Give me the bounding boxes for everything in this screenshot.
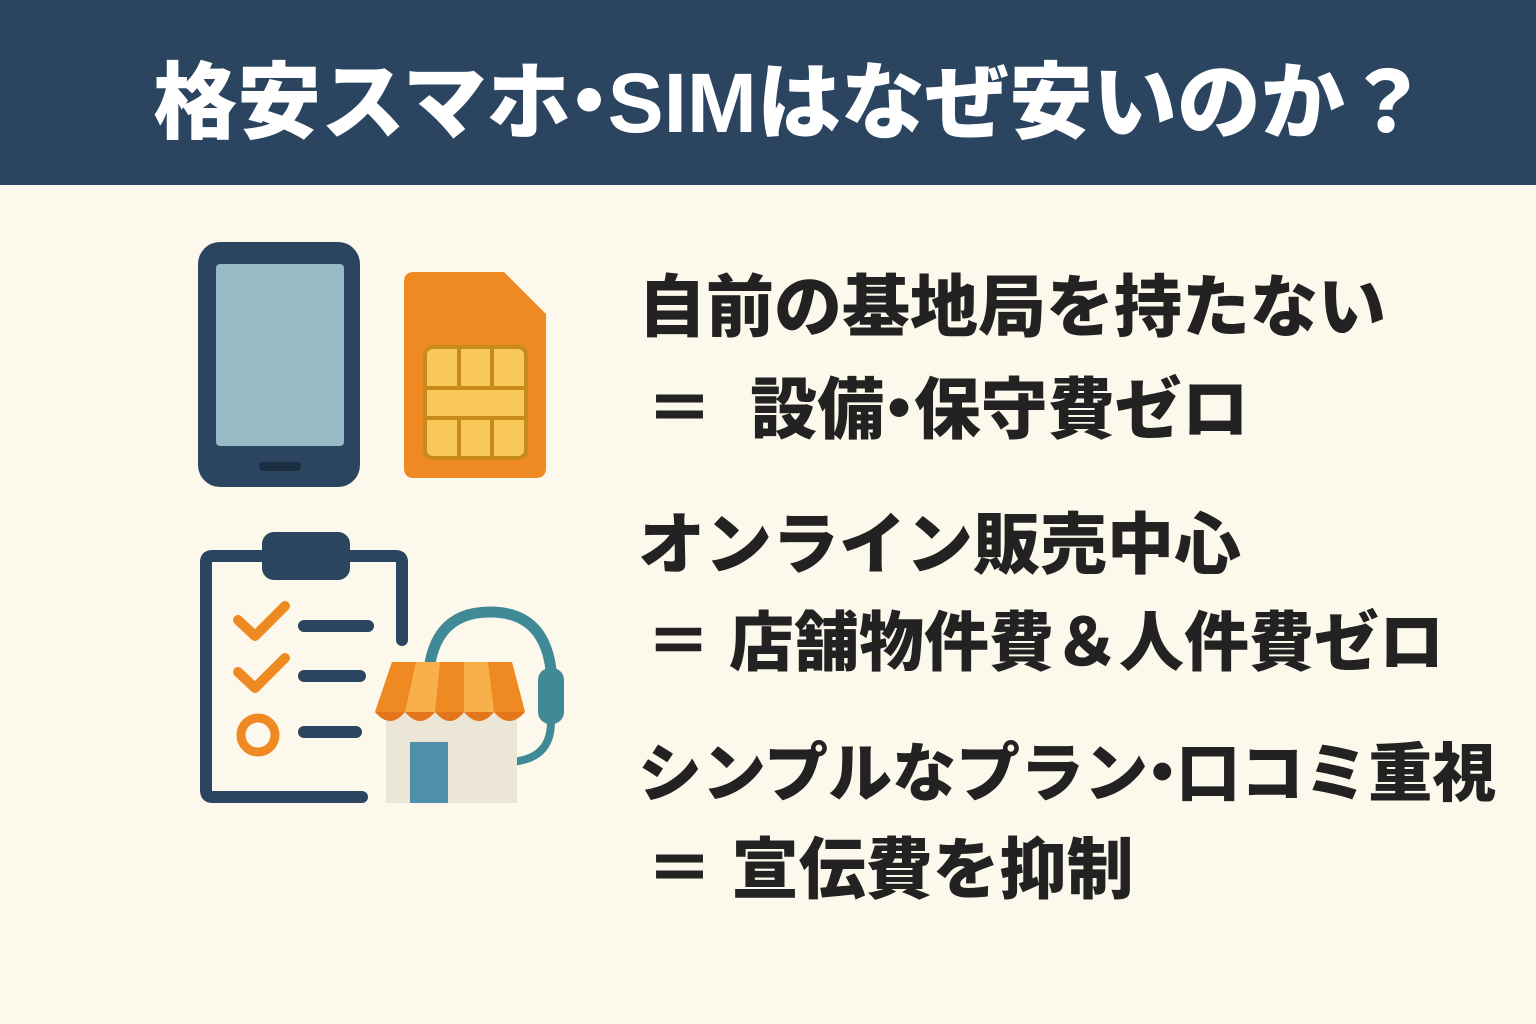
icon: smartphone — [198, 242, 360, 487]
icon: store — [375, 662, 525, 803]
title: 格安スマホ SIMはなぜ安いのか？ — [153, 56, 1429, 150]
icon: clipboard — [206, 532, 402, 797]
icon: clipboard checklist with store and headset — [200, 532, 564, 803]
text: reason 3: シンプルなプラン 口コミ重視 — [638, 738, 1496, 810]
text: result 2: ＝ 店舗物件費＆人件費ゼロ — [646, 606, 1444, 679]
text: result 1: ・ — [865, 373, 932, 448]
title: ・ — [547, 56, 631, 150]
icon: headset — [428, 612, 564, 776]
text: reason 2: オンライン販売中心 — [638, 508, 1241, 583]
icon: SIM card — [404, 272, 546, 478]
text: reason 1: 自前の基地局を持たない — [638, 270, 1386, 346]
icon: smartphone and SIM card — [198, 242, 546, 487]
text: result 1: ＝ 設備 保守費ゼロ — [646, 373, 1249, 448]
header band — [0, 0, 1536, 185]
text: result 3: ＝ 宣伝費を抑制 — [646, 833, 1134, 908]
text: reason 3: ・ — [1130, 738, 1194, 810]
